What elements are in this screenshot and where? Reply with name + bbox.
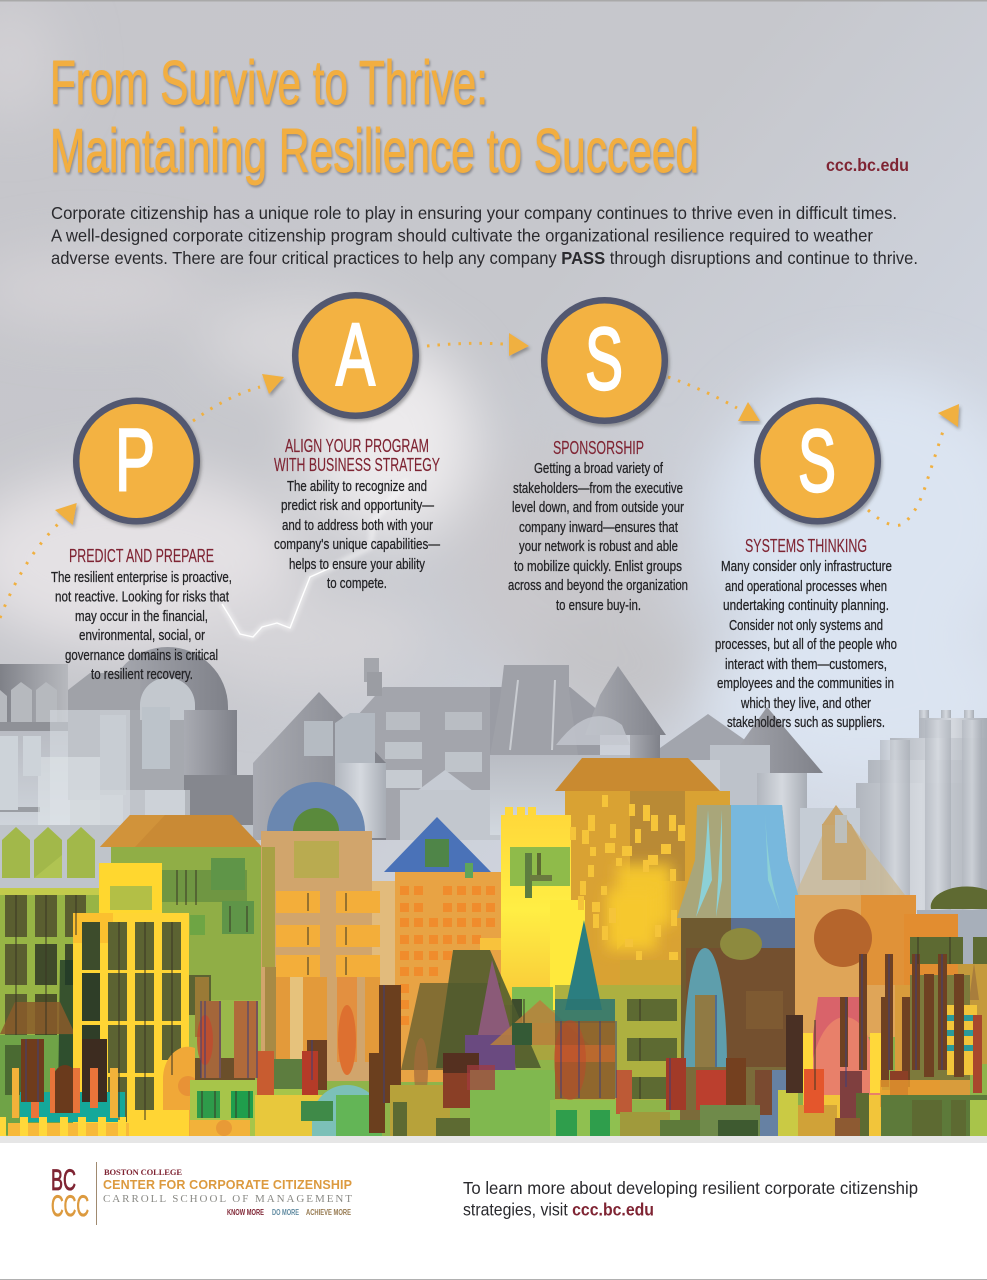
circle P: [76, 401, 197, 521]
logo: wordmark: ACHIEVE MORE: [306, 1208, 351, 1217]
arrow: A to S: [427, 333, 529, 356]
green and yellow apartment block: [0, 815, 262, 1138]
circle S: [544, 300, 665, 421]
logo: wordmark: CENTER FOR CORPORATE CITIZENSHIP: [103, 1178, 352, 1192]
panel: align your program: [274, 435, 440, 592]
body text: The ability to recognize and: [287, 479, 427, 495]
logo: BC CCC: [51, 1162, 97, 1225]
body text: may occur in the financial,: [75, 609, 208, 625]
logo: wordmark: BOSTON COLLEGE: [104, 1167, 182, 1177]
footer call to action: [463, 1178, 918, 1220]
logo: wordmark: KNOW MORE: [227, 1208, 264, 1217]
body text: processes, but all of the people who: [715, 637, 897, 653]
footer call to action: strategies, visit ccc.bc.edu: [463, 1200, 654, 1220]
circle A: A: [336, 305, 375, 404]
body text: to compete.: [327, 576, 387, 592]
dark trapezoid and purple spire: [401, 950, 590, 1102]
arrow: S onward: [868, 404, 959, 525]
intro paragraph: A well-designed corporate citizenship program should cultivate the organizational resilience required to weather: [51, 226, 873, 246]
body text: Consider not only systems and: [729, 618, 883, 634]
body text: to mobilize quickly. Enlist groups: [514, 559, 682, 575]
circle S second: [757, 401, 878, 521]
body text: across and beyond the organization: [508, 578, 688, 594]
orange house with circle and pink arch: [778, 895, 970, 1136]
logo: wordmark: [103, 1167, 352, 1217]
intro paragraph: Corporate citizenship has a unique role to play in ensuring your company continues to thrive even in difficult times.: [51, 203, 897, 223]
body text: stakeholders such as suppliers.: [727, 715, 885, 731]
thin dark window lines: [16, 870, 950, 1120]
arrow: dotted path into P: [0, 503, 77, 618]
thin blue tower lines: [26, 954, 942, 1110]
footer call to action: To learn more about developing resilient corporate citizenship: [463, 1178, 918, 1198]
body text: predict risk and opportunity—: [281, 498, 434, 514]
gold tower with lit windows: [501, 758, 730, 1010]
lightning bolt: [222, 480, 407, 637]
circle S: S: [585, 309, 623, 408]
arrow: P to A: [193, 374, 284, 421]
circle P: P: [115, 410, 155, 509]
olive low building: [512, 985, 685, 1100]
heading: SYSTEMS THINKING: [745, 535, 867, 556]
body text: Getting a broad variety of: [534, 461, 664, 477]
cooling tower and dark brown building: [660, 805, 805, 1136]
body text: to resilient recovery.: [91, 667, 193, 683]
website link: ccc.bc.edu: [826, 155, 909, 175]
body text: [274, 479, 440, 592]
heading: PREDICT AND PREPARE: [69, 545, 214, 566]
body text: environmental, social, or: [79, 628, 205, 644]
body text: [715, 559, 897, 731]
panel: predict and prepare: [51, 545, 232, 683]
body text: The resilient enterprise is proactive,: [51, 570, 232, 586]
circle S second: S: [798, 411, 836, 510]
intro paragraph: adverse events. There are four critical practices to help any company PASS through disruptions and continue to thrive.: [51, 248, 918, 268]
title: Maintaining Resilience to Succeed: [50, 117, 699, 186]
body text: [51, 570, 232, 683]
heading: ALIGN YOUR PROGRAM: [285, 435, 429, 456]
logo: BC CCC: CCC: [51, 1190, 89, 1223]
body text: and operational processes when: [725, 579, 887, 595]
tan triangle house: [795, 805, 905, 895]
green dome: [931, 887, 987, 909]
footer band: [0, 1136, 987, 1280]
heading: SPONSORSHIP: [553, 437, 644, 458]
heading: WITH BUSINESS STRATEGY: [274, 454, 440, 475]
heading: [274, 435, 440, 475]
logo: BC CCC: BC: [51, 1164, 76, 1197]
body text: Many consider only infrastructure: [721, 559, 892, 575]
city illustration: [0, 647, 987, 1138]
circle A: [295, 295, 416, 416]
brown tall towers and olive bars: [786, 937, 987, 1136]
body text: undertaking continuity planning.: [723, 598, 889, 614]
body text: level down, and from outside your: [512, 500, 684, 516]
logo: wordmark: DO MORE: [272, 1208, 299, 1217]
peach building with blue dome: [261, 782, 395, 1081]
title: [50, 49, 699, 186]
body text: employees and the communities in: [717, 676, 894, 692]
title: From Survive to Thrive:: [50, 49, 488, 118]
panel: systems thinking: [715, 535, 897, 731]
logo: wordmark: CARROLL SCHOOL OF MANAGEMENT: [103, 1193, 352, 1205]
panel: sponsorship: [508, 437, 688, 614]
body text: governance domains is critical: [65, 648, 218, 664]
blue roof orange building: [384, 817, 510, 1082]
arrow: S to S: [668, 377, 760, 421]
small green houses: [2, 827, 95, 878]
grey storm city: [0, 647, 987, 1000]
body text: [508, 461, 688, 614]
body text: interact with them—customers,: [725, 657, 887, 673]
body text: company's unique capabilities—: [274, 537, 440, 553]
body text: which they live, and other: [740, 696, 871, 712]
intro paragraph: [51, 203, 918, 268]
body text: not reactive. Looking for risks that: [55, 590, 229, 606]
teal spire and striped block: [550, 920, 670, 1136]
body text: and to address both with your: [282, 518, 433, 534]
foreground brown towers and teal block, left: [0, 1039, 189, 1136]
body text: helps to ensure your ability: [289, 557, 426, 573]
lower ground and foreground: [190, 985, 555, 1136]
ground base layer: [0, 964, 987, 1136]
body text: to ensure buy-in.: [556, 598, 641, 614]
body text: stakeholders—from the executive: [513, 481, 683, 497]
body text: your network is robust and able: [519, 539, 678, 555]
body text: company inward—ensures that: [519, 520, 678, 536]
